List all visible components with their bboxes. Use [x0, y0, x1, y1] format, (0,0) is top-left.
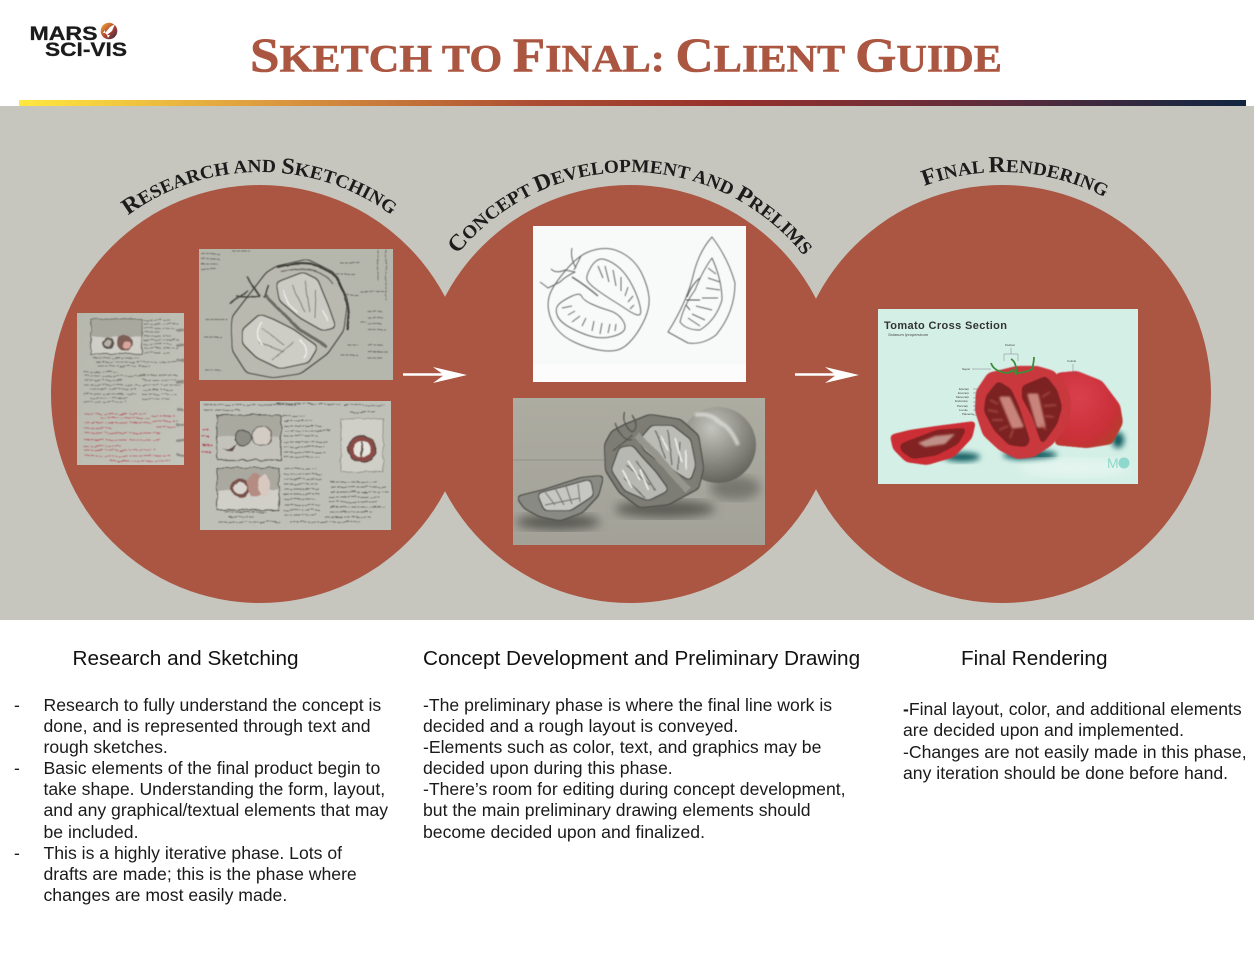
shadows [944, 432, 1124, 462]
image: final tomato rendering: Pedicel [1005, 343, 1015, 347]
text block: research bullets: be included. [44, 822, 138, 842]
text block: concept development: -There’s room for editing during concept development, [423, 779, 846, 799]
text block: research bullets: Research to fully understand the concept is [44, 695, 381, 715]
text block: final rendering: are decided upon and implemented. [903, 720, 1184, 740]
title: SKETCH TO FINAL: CLIENT GUIDE [250, 28, 1002, 82]
arrow: concept to final [795, 367, 859, 383]
arrow: research to concept [403, 367, 467, 383]
logo: Mars Sci-Vis [30, 23, 127, 61]
text block: concept development: decided upon during this phase. [423, 758, 673, 778]
text block: concept development: decided and a rough layout is conveyed. [423, 716, 738, 736]
text block: research bullets: rough sketches. [44, 737, 168, 757]
curved heading: concept development and prelims: CONCEPT DEVELOPMENT AND PRELIMS [450, 160, 812, 254]
logo: MO: M [1107, 455, 1119, 471]
logo: Mars Sci-Vis: MARS [30, 23, 98, 45]
text block: research bullets: changes are most easily made. [44, 885, 287, 905]
text block: research bullets: and any graphical/textual elements that may [44, 800, 388, 820]
text block: concept development: but the main preliminary drawing elements should [423, 800, 811, 820]
text block: research bullets: This is a highly iterative phase. Lots of [44, 843, 342, 863]
text block: research bullets: done, and is represented through text and [44, 716, 370, 736]
heading: research and sketching: Research and Sketching [72, 647, 299, 670]
text block: final rendering: -Final layout, color, and additional elements [903, 699, 1242, 719]
gradient header rule [19, 100, 1246, 106]
text block: concept development: -Elements such as color, text, and graphics may be [423, 737, 821, 757]
text block: research bullets: Basic elements of the final product begin to [44, 758, 380, 778]
text block: concept development [423, 695, 846, 842]
image: final tomato rendering: Endocarp [955, 399, 968, 403]
image: final tomato rendering: Mesocarp [956, 395, 970, 399]
icon: rocket badge [101, 23, 117, 39]
text block: concept development: -The preliminary phase is where the final line work is [423, 695, 832, 715]
labels: Tomato Cross Section [884, 320, 1007, 332]
image: handwritten notes page [77, 313, 184, 465]
text block: final rendering: any iteration should be done before hand. [903, 763, 1228, 783]
text block: research bullets [14, 695, 388, 905]
image: labelled tomato section sketch [199, 249, 393, 380]
text block: research bullets: take shape. Understanding the form, layout, [44, 779, 385, 799]
whole tomato [1055, 371, 1123, 448]
image: clean line drawing of tomato [533, 226, 746, 382]
logo: Mars Sci-Vis: SCI-VIS [45, 39, 127, 61]
text block: concept development: become decided upon and finalized. [423, 822, 705, 842]
wedge [890, 421, 976, 465]
three overlapping process circles [51, 185, 1211, 603]
curved heading: research and sketching: RESEARCH AND SKETCHING [120, 158, 396, 215]
image: final tomato rendering: Placenta [962, 412, 974, 416]
image: final tomato rendering: Epicarp [959, 387, 970, 391]
image: final tomato rendering: Cuticle [1067, 359, 1077, 363]
image: final tomato rendering: Locule [959, 408, 968, 412]
text block: research bullets: drafts are made; this is the phase where [44, 864, 357, 884]
logo: MO [1107, 455, 1130, 471]
text block: final rendering: -Changes are not easily made in this phase, [903, 742, 1247, 762]
text block: research bullets: - [14, 843, 20, 863]
image: final tomato rendering: Sepal [962, 367, 970, 371]
band: grey background [0, 106, 1254, 620]
heading: concept development: Concept Development and Preliminary Drawing [423, 647, 860, 670]
image: charcoal tomato drawing [513, 398, 765, 545]
text block: research bullets: - [14, 695, 20, 715]
text block: final rendering [903, 699, 1247, 783]
cut tomato half [975, 366, 1071, 459]
text block: research bullets: - [14, 758, 20, 778]
stem [991, 357, 1034, 375]
image: final tomato rendering: Solanum lycopersicum [888, 332, 929, 337]
image: final tomato rendering: Exocarp [958, 391, 969, 395]
curved heading: final rendering: FINAL RENDERING [920, 157, 1108, 196]
image: final tomato rendering [878, 309, 1138, 484]
image: final tomato rendering: Pericarp [957, 404, 969, 408]
heading: final rendering: Final Rendering [961, 647, 1108, 670]
image: thumbnail sketches sheet [200, 401, 391, 530]
